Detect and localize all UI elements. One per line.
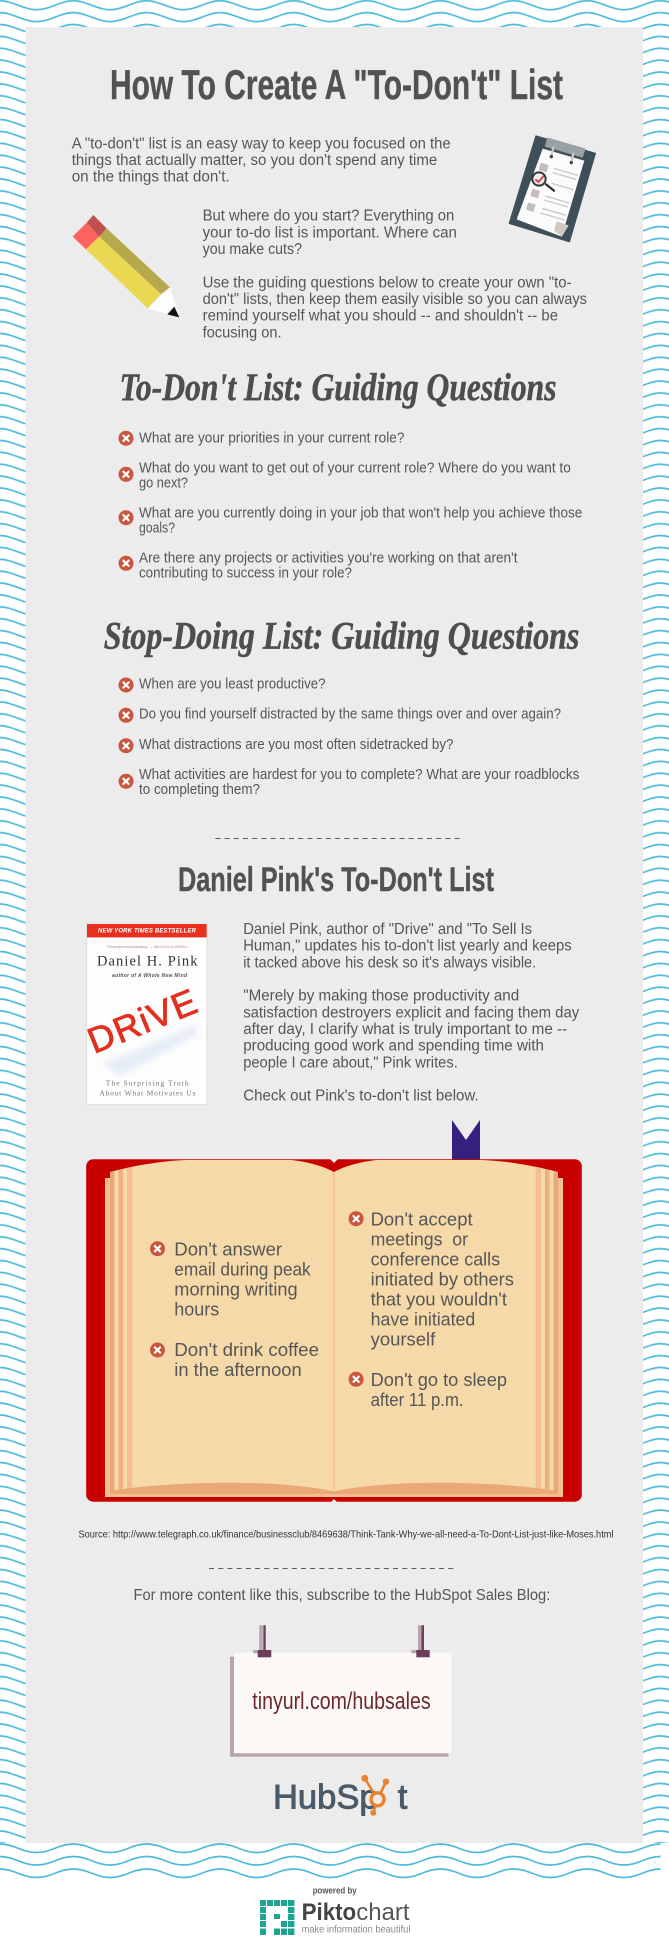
question 3: What distractions are you most often sidetracked by? <box>139 737 454 753</box>
question 2 <box>118 460 571 491</box>
item: don't answer email <box>150 1240 312 1320</box>
heading: To-Don't list guiding questions: To-Don't List: Guiding Questions <box>120 366 556 409</box>
question 2: What do you want to get out of your current role? Where do you want to <box>139 460 571 476</box>
question 4: Are there any projects or activities you're working on that aren't <box>139 551 518 567</box>
question 3 <box>118 506 582 537</box>
book cover: Drive: About What Motivates Us <box>99 1089 195 1098</box>
powered by Piktochart logo: chart <box>356 1899 410 1926</box>
book cover: Drive: "Provocative and fascinating." — MALCOLM GLADWELL <box>107 944 188 949</box>
item: don't go to sleep: Don't go to sleep <box>371 1370 507 1390</box>
hanging sign: tinyurl.com/hubsales <box>252 1688 431 1715</box>
text block: where do you start: you make cuts? <box>203 241 302 258</box>
source line: Source: http://www.telegraph.co.uk/finance/businessclub/8469638/Think-Tank-Why-we-all-need-a-To-Dont-List-just-like-Moses.html <box>78 1528 614 1540</box>
text block: use the guiding questions: remind yourself what you should -- and shouldn't -- be <box>203 308 558 325</box>
right page <box>334 1158 563 1498</box>
intro paragraph <box>72 136 451 186</box>
item: don't accept meetings: conference calls <box>371 1250 500 1270</box>
powered by Piktochart logo: powered by <box>313 1886 357 1896</box>
item: don't accept meetings: that you wouldn't <box>371 1290 507 1310</box>
text block: use the guiding questions <box>203 274 587 341</box>
hanging sign <box>230 1625 452 1757</box>
book cover: Drive: The Surprising Truth <box>106 1079 189 1088</box>
bottom wave border <box>0 1844 661 1878</box>
book cover <box>86 1159 582 1502</box>
text block: use the guiding questions: don't" lists, then keep them easily visible so you can always <box>203 291 587 308</box>
left page list <box>150 1240 319 1380</box>
powered by Piktochart logo <box>260 1886 410 1935</box>
book cover: Drive <box>82 923 207 1105</box>
question 1: What are your priorities in your current role? <box>139 430 404 446</box>
text block: Daniel Pink bio <box>243 921 572 971</box>
heading: stop-doing list guiding questions: Stop-Doing List: Guiding Questions <box>104 614 579 657</box>
text block: Pink quote: satisfaction destroyers explicit and facing them day <box>243 1004 579 1021</box>
item: don't drink coffee <box>150 1340 319 1380</box>
HubSpot logo: HubSpot <box>273 1778 408 1816</box>
icon: Piktochart mark <box>260 1900 294 1935</box>
book cover: Drive: Daniel H. Pink <box>97 954 198 970</box>
text block: Pink quote <box>243 988 579 1071</box>
item: don't go to sleep <box>349 1370 507 1410</box>
text block: Daniel Pink bio: Daniel Pink, author of "Drive" and "To Sell Is <box>243 921 532 938</box>
question 2: Do you find yourself distracted by the same things over and over again? <box>139 707 561 723</box>
item: don't go to sleep: after 11 p.m. <box>371 1390 464 1410</box>
bookmark <box>452 1120 480 1162</box>
question 2: go next? <box>139 475 188 491</box>
item: don't answer email: hours <box>174 1300 219 1320</box>
item: don't answer email: email during peak <box>174 1260 312 1280</box>
left page <box>105 1158 334 1498</box>
text block: Pink quote: "Merely by making those productivity and <box>243 988 519 1005</box>
item: don't answer email: morning writing <box>174 1280 298 1300</box>
text block: check out the list: Check out Pink's to-don't list below. <box>243 1088 479 1105</box>
question 3: goals? <box>139 521 175 537</box>
text block: where do you start <box>203 208 457 258</box>
intro paragraph: A "to-don't" list is an easy way to keep you focused on the <box>72 136 451 152</box>
question 4 <box>118 767 579 798</box>
icon: clipboard <box>509 136 595 242</box>
text block: Daniel Pink bio: it tacked above his desk so it's always visible. <box>243 954 536 971</box>
icon: pencil <box>73 215 179 317</box>
question 4: What activities are hardest for you to complete? What are your roadblocks <box>139 767 579 783</box>
book cover: Drive: DRiVE <box>82 981 203 1061</box>
item: don't drink coffee: in the afternoon <box>174 1360 302 1380</box>
item: don't accept meetings: meetings or <box>371 1230 468 1250</box>
text block: use the guiding questions: focusing on. <box>203 324 282 341</box>
book cover: Drive: author of A Whole New Mind <box>112 973 188 979</box>
heading: Daniel Pink's to-don't list: Daniel Pink's To-Don't List <box>178 861 494 899</box>
item: don't answer email: Don't answer <box>174 1240 282 1260</box>
item: don't accept meetings: initiated by others <box>371 1270 514 1290</box>
list: to-don't questions <box>118 430 582 582</box>
question 4: to completing them? <box>139 782 260 798</box>
intro paragraph: things that actually matter, so you don't spend any time <box>72 152 437 169</box>
text block: Pink quote: people I care about," Pink writes. <box>243 1054 458 1071</box>
intro paragraph: on the things that don't. <box>72 169 230 186</box>
text block: where do you start: your to-do list is important. Where can <box>203 224 457 241</box>
list: stop-doing questions <box>118 676 579 798</box>
item: don't accept meetings: yourself <box>371 1330 436 1350</box>
question 4 <box>118 551 518 582</box>
question 4: contributing to success in your role? <box>139 566 352 582</box>
powered by Piktochart logo: make information beautiful <box>302 1924 410 1935</box>
text block: where do you start: But where do you start? Everything on <box>203 208 454 225</box>
subscribe call to action: For more content like this, subscribe to the HubSpot Sales Blog: <box>134 1587 550 1604</box>
item: don't accept meetings <box>349 1210 514 1350</box>
question 1: When are you least productive? <box>139 676 326 692</box>
text block: Pink quote: after day, I clarify what is truly important to me -- <box>243 1021 567 1038</box>
right page list <box>349 1210 514 1410</box>
item: don't accept meetings: have initiated <box>371 1310 475 1330</box>
item: don't accept meetings: Don't accept <box>371 1210 473 1230</box>
text block: Daniel Pink bio: Human," updates his to-don't list yearly and keeps <box>243 938 572 955</box>
open book illustration <box>86 1120 582 1502</box>
item: don't drink coffee: Don't drink coffee <box>174 1340 319 1360</box>
book cover: Drive: NEW YORK TIMES BESTSELLER <box>98 929 197 935</box>
question 3: What are you currently doing in your job that won't help you achieve those <box>139 506 582 522</box>
text block: Pink quote: producing good work and spending time with <box>243 1038 544 1055</box>
powered by Piktochart logo: Pikto <box>302 1899 356 1926</box>
text block: use the guiding questions: Use the guiding questions below to create your own "to- <box>203 274 572 291</box>
